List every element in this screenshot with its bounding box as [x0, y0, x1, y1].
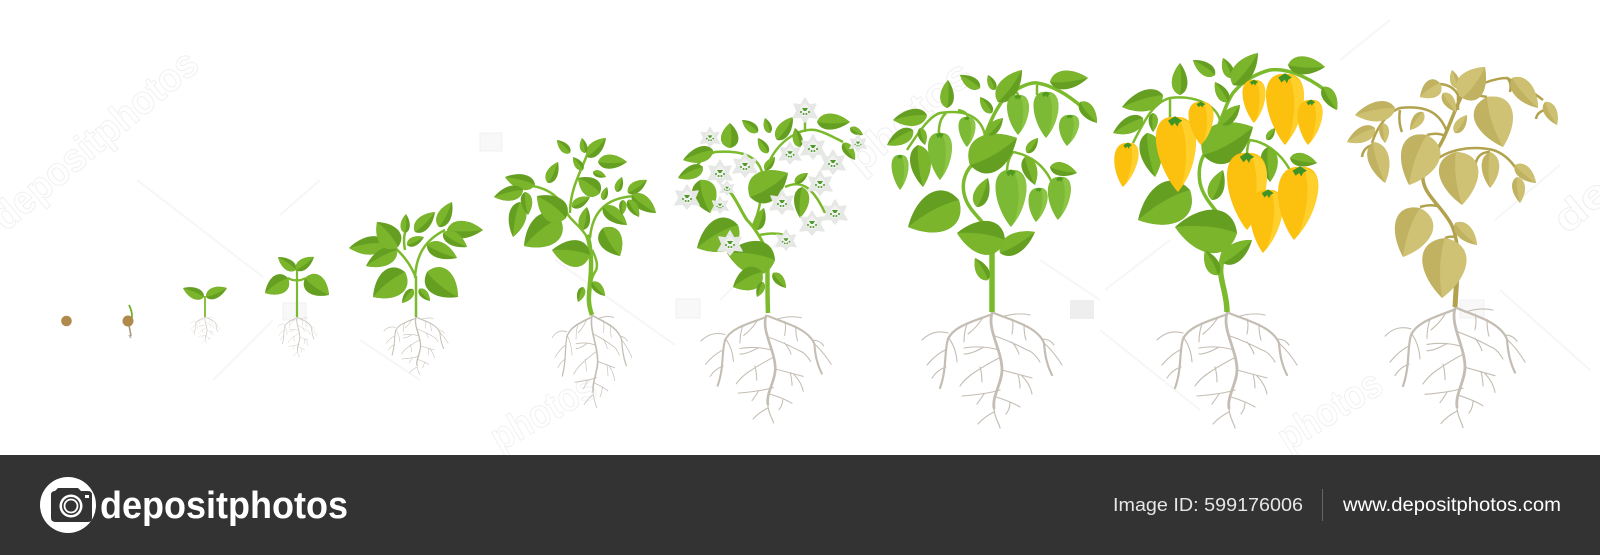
roots: [1385, 308, 1525, 428]
stems: [392, 226, 445, 317]
stems: [1133, 70, 1325, 312]
stems: [510, 155, 652, 315]
flowers: [675, 98, 866, 255]
leaves: [884, 64, 1102, 283]
leaves: [181, 283, 229, 302]
watermark pattern: photos: [1269, 361, 1390, 460]
stem: [204, 296, 206, 317]
stage 9: yellow fruit plant: [1110, 47, 1343, 428]
leaves: [675, 113, 865, 299]
stage 6: leafy plant: [492, 133, 661, 408]
stem: [288, 270, 305, 317]
roots: [552, 316, 632, 408]
watermark pattern: photos: [482, 364, 604, 460]
stage 10: withering plant: [1344, 58, 1563, 428]
roots: [701, 316, 831, 423]
leaves: [348, 199, 483, 309]
leaves: [260, 252, 335, 303]
roots: [1157, 313, 1297, 428]
stage 5: young plant: [348, 199, 483, 375]
green peppers: [891, 92, 1080, 227]
stems: [1362, 78, 1545, 307]
leaves: [492, 133, 661, 303]
leaves: [1110, 47, 1343, 278]
stage 8: green fruit plant: [884, 64, 1102, 428]
divider: [1322, 489, 1323, 521]
stage 7: flowering plant: [675, 98, 866, 423]
website url: www.depositphotos.com: [1342, 495, 1561, 516]
logo wordmark: depositphotos: [100, 485, 348, 527]
roots: [277, 317, 317, 358]
logo icon: camera in circle: [40, 477, 96, 533]
roots: [190, 317, 220, 344]
watermark pattern: photos: [838, 52, 981, 182]
stage 2: germinating seed: [122, 305, 134, 338]
yellow peppers: [1111, 73, 1324, 253]
footer bar: [0, 455, 1600, 555]
stage 1: seed: [61, 316, 72, 326]
watermark pattern: [0, 20, 1600, 460]
stage 3: seedling: [181, 283, 229, 344]
withered leaves: [1344, 58, 1563, 299]
stems: [907, 83, 1083, 312]
stems: [690, 110, 843, 313]
roots: [922, 313, 1062, 428]
image id: Image ID: 599176006: [1113, 495, 1303, 515]
roots: [384, 318, 448, 375]
stage 4: young sprout: [260, 252, 335, 358]
